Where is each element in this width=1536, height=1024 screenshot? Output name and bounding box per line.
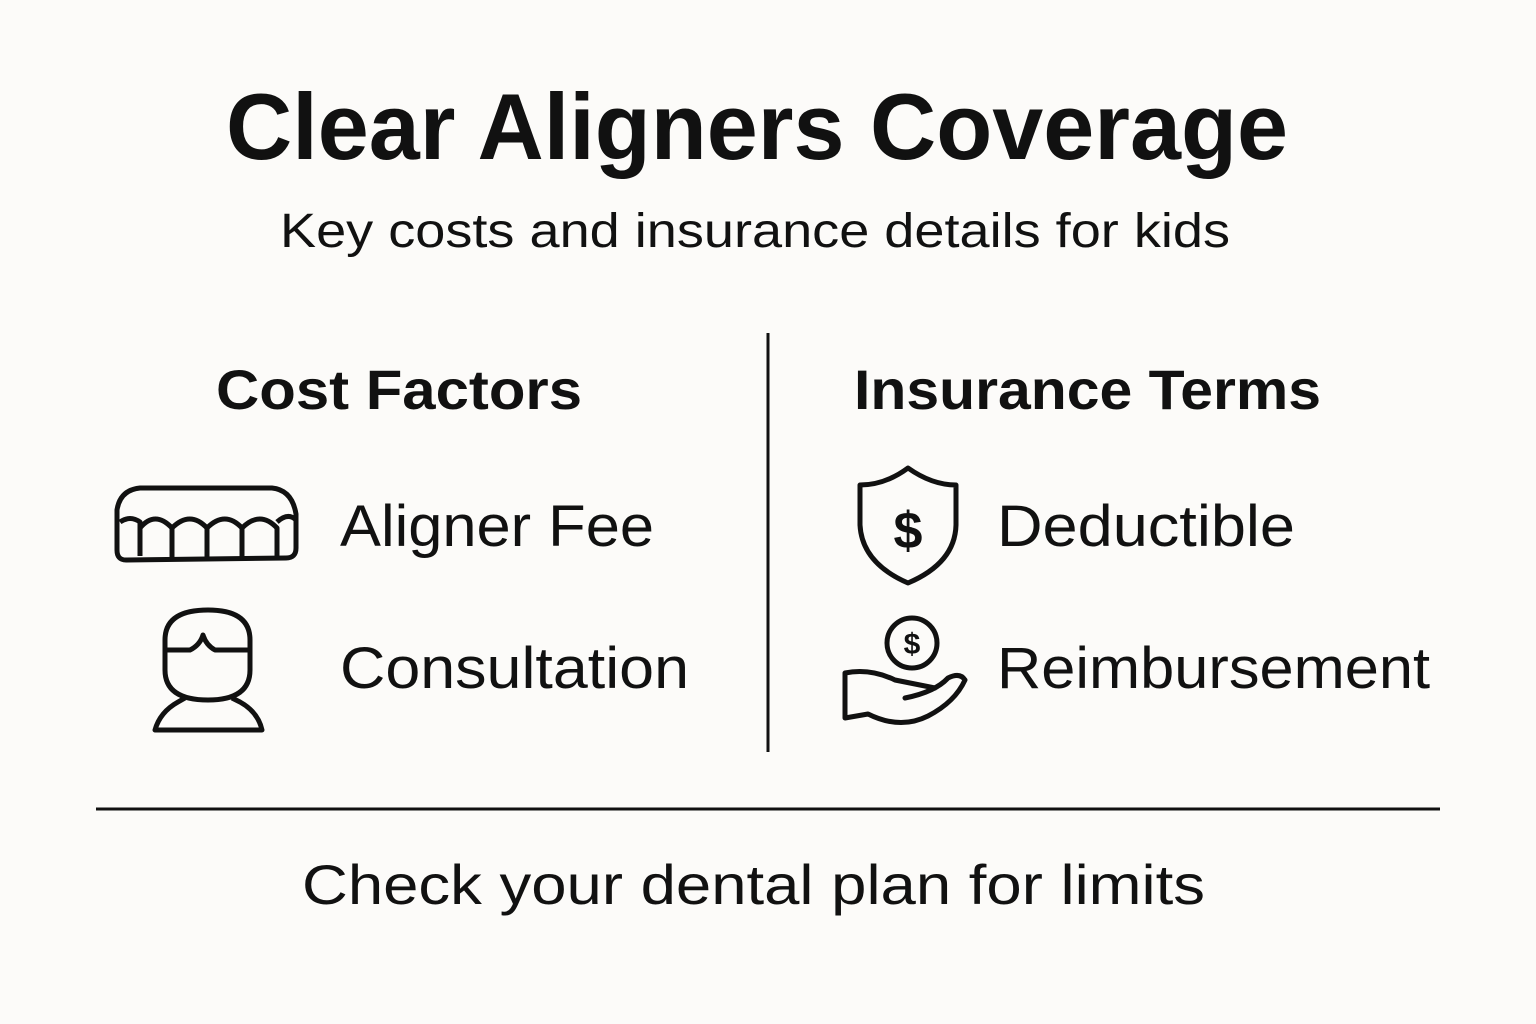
heading: cost factors: Cost Factors <box>216 358 582 421</box>
icon: shield dollar: $ <box>894 502 923 560</box>
panel: cost factors <box>117 358 689 730</box>
title: Clear Aligners Coverage <box>226 74 1288 179</box>
icon: hand with coin <box>845 618 965 723</box>
panel: insurance terms <box>845 358 1430 723</box>
text: deductible: Deductible <box>997 494 1295 559</box>
icon: person <box>155 610 262 730</box>
heading: insurance terms: Insurance Terms <box>854 358 1321 421</box>
icon: hand with coin: $ <box>904 628 921 661</box>
footer note: Check your dental plan for limits <box>302 853 1205 916</box>
icon: shield dollar <box>860 468 956 583</box>
icon: aligner teeth <box>117 488 296 560</box>
text: reimbursement: Reimbursement <box>997 636 1430 701</box>
text: aligner fee: Aligner Fee <box>340 494 654 559</box>
text: consultation: Consultation <box>340 636 689 701</box>
subtitle: Key costs and insurance details for kids <box>280 205 1230 258</box>
